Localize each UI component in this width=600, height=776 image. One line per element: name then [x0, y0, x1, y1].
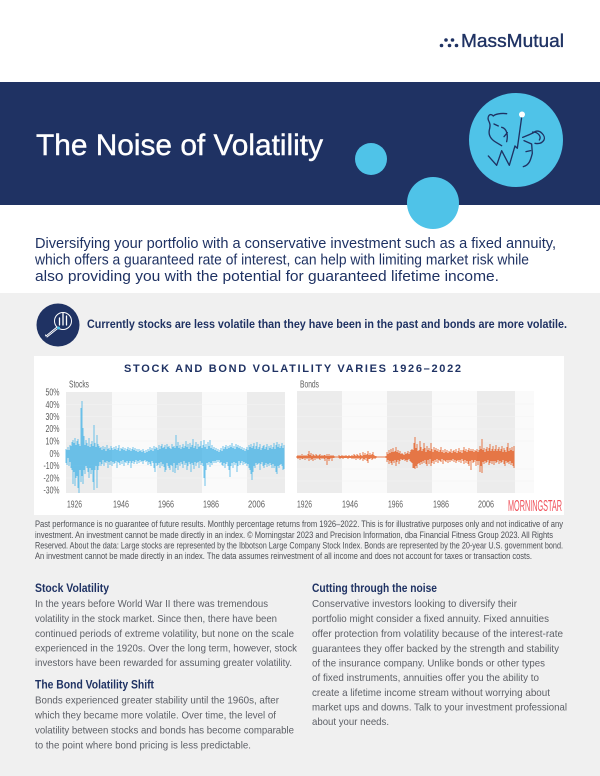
text: stock volatility body: In the years before World War II there was tremendous — [35, 598, 268, 610]
chart: stocks: -10% — [44, 461, 60, 472]
chart: stocks: Stocks — [69, 380, 89, 390]
text: bond volatility body: Bonds experienced greater stability until the 1960s, after — [35, 694, 279, 706]
chart: stocks: 10% — [46, 436, 60, 448]
text: stock volatility body: investors have been rewarded for assuming greater volatility. — [35, 657, 292, 669]
text: bond volatility body: which they became more volatile. Over time, the level of — [34, 710, 276, 722]
icon: magnifying glass over bar chart — [36, 304, 80, 346]
heading: bond volatility shift: The Bond Volatility Shift — [35, 680, 154, 692]
text: bond volatility body — [34, 694, 294, 752]
chart: bonds: 1966 — [388, 500, 403, 510]
chart: bonds: 1926 — [297, 500, 312, 510]
text: cutting through the noise body: offer protection from volatility because of the interest-rate — [312, 628, 563, 640]
text: bond volatility body: volatility between stocks and bonds has become comparable — [35, 724, 294, 736]
intro paragraph: Diversifying your portfolio with a conservative investment such as a fixed annuity, — [35, 236, 556, 252]
section: stock volatility — [35, 583, 298, 669]
text: cutting through the noise body: market ups and downs. Talk to your investment professional — [312, 702, 567, 714]
chart title: STOCK AND BOND VOLATILITY VARIES 1926–2022 — [124, 363, 461, 375]
chart: stocks: 1966 — [158, 500, 174, 510]
text: bond volatility body: to the point where bond pricing is less predictable. — [35, 740, 251, 752]
callout statement: Currently stocks are less volatile than they have been in the past and bonds are more volatile. — [87, 319, 567, 331]
intro paragraph: which offers a guaranteed rate of interest, can help with limiting market risk while — [34, 252, 529, 268]
section: cutting through the noise — [312, 583, 567, 728]
chart: bonds: Bonds — [300, 380, 319, 390]
chart: stocks — [44, 380, 285, 510]
text: stock volatility body — [35, 598, 298, 669]
text: cutting through the noise body: guarantees they offer backed by the strength and stability — [312, 643, 560, 655]
disclaimer footnote — [35, 519, 563, 561]
chart: stocks: 0% — [50, 449, 60, 460]
text: cutting through the noise body: Conservative investors looking to diversify their — [312, 598, 517, 610]
chart: stocks: 1926 — [67, 500, 82, 510]
text: stock volatility body: continued periods of extreme volatility, but none on the scale — [35, 628, 294, 640]
section: bond volatility shift — [34, 680, 294, 752]
text: cutting through the noise body: about your needs. — [312, 716, 389, 728]
chart: bonds: 2006 — [478, 500, 494, 510]
chart: bonds: 1986 — [433, 500, 449, 510]
chart: stocks: 40% — [46, 400, 60, 411]
text: cutting through the noise body — [312, 598, 567, 728]
text: stock volatility body: volatility in the stock market. Since then, there have been — [35, 613, 277, 625]
chart: stocks: 20% — [46, 424, 60, 435]
heading: stock volatility: Stock Volatility — [35, 583, 110, 595]
text: cutting through the noise body: of the insurance company. Unlike bonds or other types — [312, 658, 545, 670]
chart: stocks: 2006 — [248, 500, 265, 510]
intro paragraph — [34, 236, 556, 285]
icon: bull and bear with volatile line — [469, 93, 563, 187]
heading: cutting through the noise: Cutting through the noise — [312, 583, 437, 595]
chart: stocks: 1946 — [113, 500, 129, 510]
chart: bonds: 1946 — [342, 500, 358, 510]
header banner — [0, 82, 600, 229]
text: cutting through the noise body: portfolio might consider a fixed annuity. Fixed annuities — [312, 613, 549, 625]
chart: stocks: -30% — [44, 486, 60, 496]
chart: stocks: 30% — [46, 412, 60, 423]
text: stock volatility body: experienced in the 1920s. Over the long term, however, stock — [35, 642, 298, 654]
text: cutting through the noise body: of fixed instruments, annuities offer you the ability to — [312, 672, 539, 684]
text: cutting through the noise body: create a lifetime income stream without worrying about — [312, 687, 550, 699]
chart: stocks: -20% — [44, 474, 60, 484]
panel: volatility chart — [34, 356, 564, 515]
chart: bonds — [297, 380, 534, 510]
chart: stocks: 1986 — [203, 500, 219, 510]
chart: stocks: 50% — [46, 388, 60, 398]
title: The Noise of Volatility — [36, 129, 323, 162]
logo: MassMutual: MassMutual — [461, 31, 564, 51]
intro paragraph: also providing you with the potential for guaranteed lifetime income. — [35, 269, 499, 285]
